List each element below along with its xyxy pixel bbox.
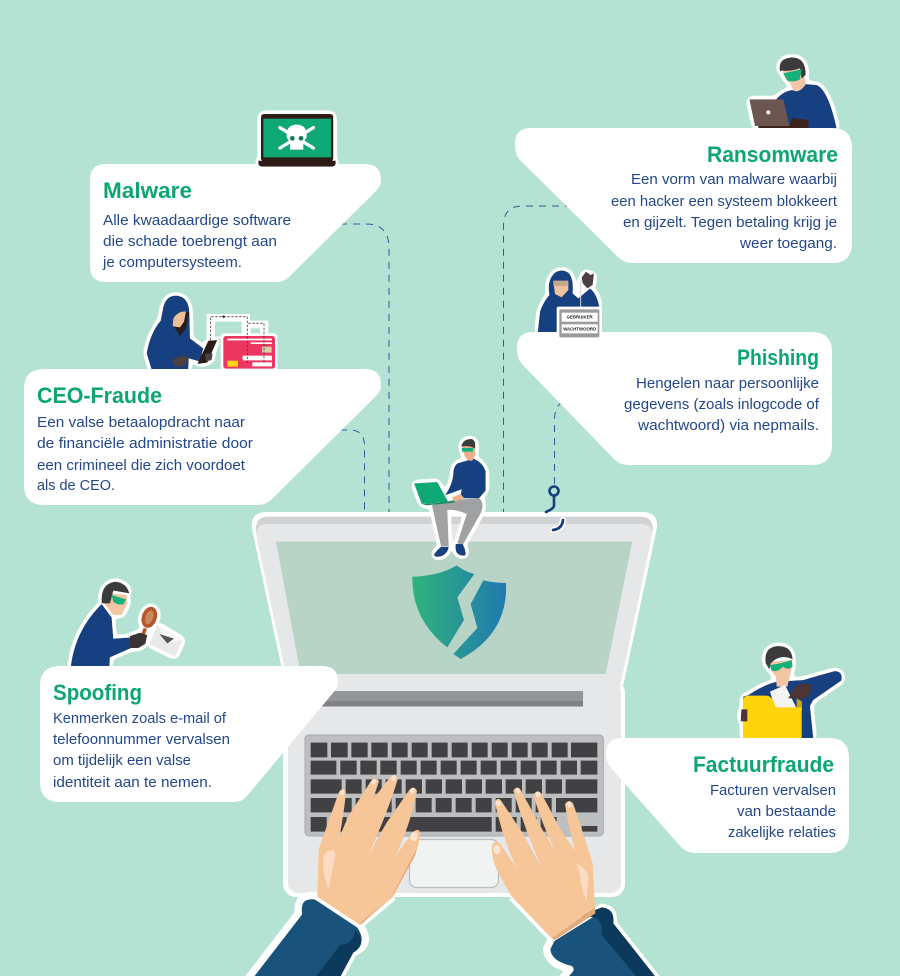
broken shield xyxy=(412,565,506,659)
dashed paths xyxy=(211,317,264,363)
body text xyxy=(53,711,230,791)
left hand xyxy=(317,774,420,925)
fishing line xyxy=(579,280,582,307)
panel shape xyxy=(24,369,381,505)
body text xyxy=(611,172,837,252)
hand xyxy=(789,118,808,128)
dashed connector lines xyxy=(340,206,572,514)
heading: Factuurfraude xyxy=(693,752,834,777)
body text: een crimineel die zich voordoet xyxy=(37,458,245,474)
body text: telefoonnummer vervalsen xyxy=(53,732,230,748)
heading: Ransomware xyxy=(707,142,838,167)
body text xyxy=(710,783,836,841)
nails xyxy=(492,787,572,855)
neck and face xyxy=(783,68,806,91)
shoes xyxy=(434,544,466,557)
panel shape xyxy=(517,332,832,465)
skull xyxy=(287,125,307,150)
body text: een hacker een systeem blokkeert xyxy=(611,194,837,210)
face xyxy=(553,282,568,297)
glove xyxy=(582,272,594,288)
magnifying glass xyxy=(138,607,158,647)
envelope xyxy=(149,625,183,657)
hand xyxy=(452,494,464,502)
trackpad xyxy=(410,840,498,888)
body text: wachtwoord) via nepmails. xyxy=(637,418,819,434)
body text: je computersysteem. xyxy=(102,255,242,271)
body text: als de CEO. xyxy=(37,478,115,494)
right sleeve xyxy=(547,907,663,976)
glove xyxy=(130,633,147,648)
legs xyxy=(432,498,483,546)
head xyxy=(462,441,475,461)
panel shape xyxy=(515,128,852,263)
neck and face xyxy=(770,660,793,687)
mask xyxy=(112,595,126,605)
white papers xyxy=(207,314,268,338)
paper xyxy=(770,685,797,708)
nails xyxy=(340,774,419,842)
body text: de financiële administratie door xyxy=(37,436,253,452)
body text: gegevens (zoals inlogcode of xyxy=(624,397,820,413)
laptop base xyxy=(283,680,625,897)
icon: infected laptop with skull xyxy=(258,114,336,167)
panel: Factuurfraude xyxy=(606,738,849,853)
card xyxy=(223,336,275,369)
body text: Een vorm van malware waarbij xyxy=(631,172,837,188)
body xyxy=(776,84,837,128)
body text: Een valse betaalopdracht naar xyxy=(37,415,245,431)
hair xyxy=(780,57,806,79)
glove on paper xyxy=(788,684,811,699)
body text: en gijzelt. Tegen betaling krijg je xyxy=(623,215,837,231)
hooded CEO fraudster with tablet xyxy=(147,296,217,370)
tablet xyxy=(197,340,217,364)
hinge bar xyxy=(320,691,583,706)
face xyxy=(173,312,186,328)
laptop lid xyxy=(252,512,657,693)
laptop xyxy=(252,512,657,897)
panel shape xyxy=(606,738,849,853)
green screen xyxy=(263,119,331,157)
hair xyxy=(101,582,129,603)
panel: CEO-Fraude xyxy=(24,369,381,505)
body text: zakelijke relaties xyxy=(728,825,836,841)
body text: Hengelen naar persoonlijke xyxy=(636,376,819,392)
crossbones xyxy=(280,128,313,148)
body xyxy=(71,604,133,667)
laptop xyxy=(749,99,789,126)
hacker with magnifying glass and envelope xyxy=(71,582,158,667)
glove xyxy=(172,356,188,367)
body text: die schade toebrengt aan xyxy=(103,234,277,250)
green laptop xyxy=(414,482,448,504)
mask xyxy=(783,69,802,81)
thumb on folder xyxy=(741,709,747,721)
body text: Kenmerken zoals e-mail of xyxy=(53,711,227,727)
heading: CEO-Fraude xyxy=(37,383,162,408)
hacker sitting on laptop xyxy=(414,439,486,557)
hacker with laptop xyxy=(749,57,837,128)
keyboard xyxy=(305,735,603,836)
face xyxy=(104,593,127,615)
body text: Facturen vervalsen xyxy=(710,783,836,799)
hooded phisher xyxy=(538,270,599,333)
torso xyxy=(445,459,486,498)
hooded body xyxy=(147,296,203,370)
laptop screen xyxy=(276,542,632,674)
left sleeve xyxy=(242,896,365,976)
panel shape xyxy=(40,666,338,802)
panel shape xyxy=(90,164,381,282)
body text xyxy=(37,415,253,494)
body text xyxy=(102,213,291,271)
yellow folder xyxy=(743,696,802,738)
heading: Malware xyxy=(103,178,192,203)
login box xyxy=(557,307,602,340)
body text: identiteit aan te nemen. xyxy=(53,775,212,791)
panel: Malware xyxy=(90,164,381,282)
body text: om tijdelijk een valse xyxy=(53,753,191,769)
login box: GEBRUIKER xyxy=(567,315,594,320)
hacker with yellow folder xyxy=(741,646,842,738)
laptop base xyxy=(258,161,336,167)
heading: Phishing xyxy=(737,345,819,370)
credit card with dashed papers xyxy=(207,314,277,371)
mask xyxy=(769,660,793,671)
panel: Spoofing xyxy=(40,666,338,802)
body text: weer toegang. xyxy=(739,236,837,252)
hands and sleeves xyxy=(242,774,663,976)
body text: Alle kwaadaardige software xyxy=(103,213,291,229)
panel: Ransomware xyxy=(515,128,852,263)
hair xyxy=(765,646,793,669)
laptop frame xyxy=(261,114,333,161)
panel: Phishing xyxy=(517,332,832,465)
fish hook xyxy=(546,486,563,530)
body text xyxy=(624,376,820,434)
hooded body xyxy=(538,270,599,333)
body and arm xyxy=(743,671,842,738)
right hand xyxy=(492,787,595,940)
body text: van bestaande xyxy=(737,804,836,820)
heading: Spoofing xyxy=(53,680,142,705)
login box: WACHTWOORD xyxy=(563,326,596,331)
